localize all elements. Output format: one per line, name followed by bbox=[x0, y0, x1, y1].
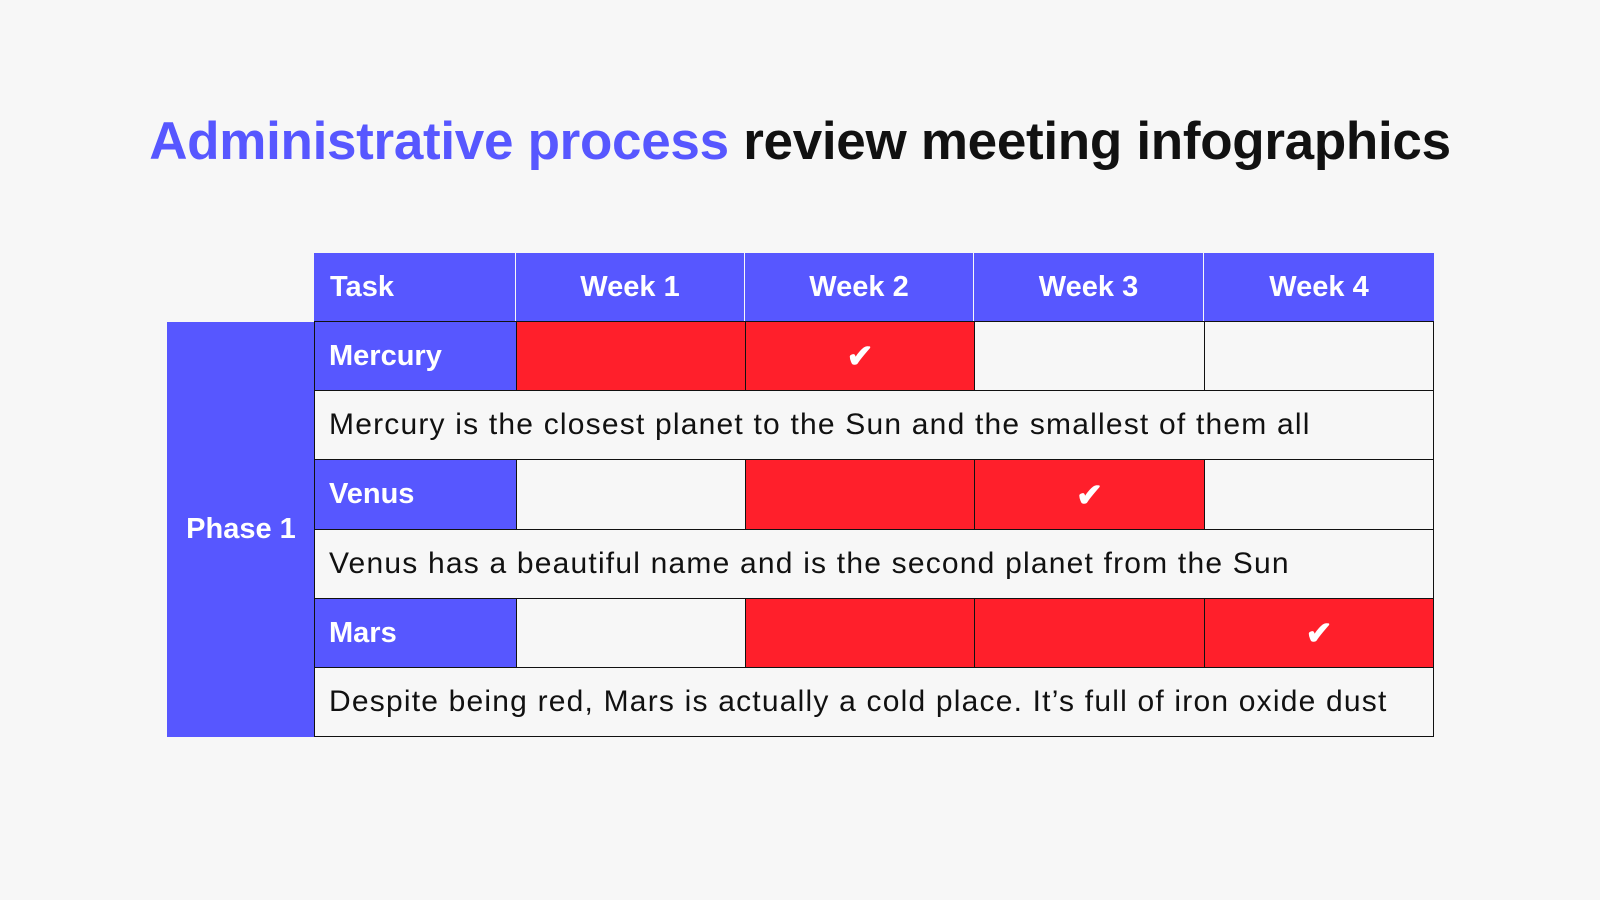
row: Venus bbox=[314, 460, 1434, 529]
row: Mercury: ✔ bbox=[847, 338, 873, 374]
header row: Week 3 bbox=[1039, 270, 1138, 302]
row: Mars bbox=[314, 599, 1434, 667]
row: Mars: Mars bbox=[329, 616, 397, 648]
title: Administrative process review meeting infographics bbox=[149, 112, 1451, 171]
row: Venus: ✔ bbox=[1076, 476, 1103, 512]
header row: Week 1 bbox=[580, 270, 680, 302]
row: Mercury: Mercury bbox=[329, 340, 442, 372]
table bbox=[314, 253, 1434, 737]
description: Venus: Venus has a beautiful name and is the second planet from the Sun bbox=[329, 547, 1290, 580]
phase label bbox=[167, 322, 315, 737]
header row: Task bbox=[330, 270, 394, 302]
description: Mercury bbox=[314, 390, 1434, 460]
row: Mercury bbox=[314, 321, 1434, 390]
description: Mars bbox=[314, 667, 1434, 737]
phase label: Phase 1 bbox=[186, 513, 296, 545]
header row: Week 4 bbox=[1269, 270, 1369, 302]
row: Venus: Venus bbox=[329, 478, 414, 510]
description: Venus bbox=[314, 529, 1434, 599]
header row: Week 2 bbox=[809, 270, 909, 302]
header row bbox=[314, 253, 1434, 321]
description: Mars: Despite being red, Mars is actually a cold place. It’s full of iron oxide dust bbox=[329, 685, 1388, 718]
row: Mars: ✔ bbox=[1306, 615, 1332, 651]
description: Mercury: Mercury is the closest planet to the Sun and the smallest of them all bbox=[329, 408, 1311, 441]
